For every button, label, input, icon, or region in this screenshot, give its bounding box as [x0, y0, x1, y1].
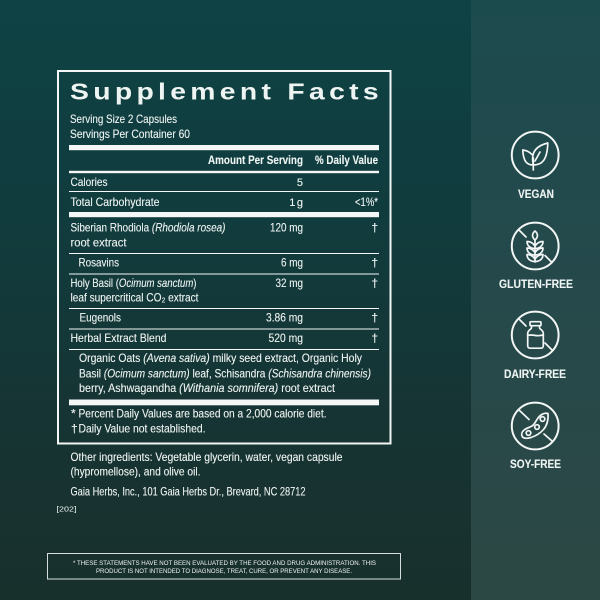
- badge: vegan: [512, 132, 559, 201]
- row: holy basil: Holy Basil (Ocimum sanctum): [70, 276, 196, 290]
- footnotes: †: [71, 422, 78, 436]
- table header: [208, 153, 378, 167]
- row: siberian rhodiola: Siberian Rhodiola (Rhodiola rosea): [70, 221, 226, 235]
- table header: % Daily Value: [315, 153, 378, 167]
- row: rosavins: 6 mg: [281, 256, 303, 270]
- row: eugenols: †: [371, 311, 378, 325]
- badge: vegan: VEGAN: [518, 187, 554, 201]
- blend ingredients: Organic Oats (Avena sativa) milky seed extract, Organic Holy: [79, 351, 362, 365]
- row: total carbohydrate: Total Carbohydrate: [70, 195, 160, 209]
- row: calories: [70, 175, 303, 189]
- badge: dairy-free: [504, 312, 566, 381]
- disclaimer box: [48, 554, 400, 579]
- row: rosavins: [78, 256, 378, 270]
- footnotes: Daily Value not established.: [78, 422, 206, 436]
- serving information: [70, 112, 190, 141]
- icon: crossed milk bottle: [512, 312, 559, 358]
- disclaimer box: PRODUCT IS NOT INTENDED TO DIAGNOSE, TREAT, CURE, OR PREVENT ANY DISEASE.: [96, 568, 352, 575]
- row: eugenols: 3.86 mg: [266, 311, 303, 325]
- panel: supplement facts: [58, 71, 390, 444]
- lot code: [202]: [56, 506, 77, 514]
- other ingredients: Other ingredients: Vegetable glycerin, water, vegan capsule: [70, 450, 343, 464]
- footnotes: [71, 407, 326, 436]
- blend ingredients: berry, Ashwagandha (Withania somnifera) root extract: [79, 381, 336, 395]
- table rules: [69, 145, 379, 405]
- icon: leaves: [512, 132, 559, 178]
- serving information: Servings Per Container 60: [70, 127, 190, 141]
- row: herbal extract blend: 520 mg: [268, 331, 303, 345]
- badge: gluten-free: [499, 223, 573, 291]
- row: holy basil: †: [371, 276, 378, 290]
- row: holy basil: leaf supercritical CO₂ extract: [70, 291, 199, 305]
- background: main panel: [0, 0, 471, 600]
- badge: dairy-free: DAIRY-FREE: [504, 367, 566, 381]
- icon: crossed wheat: [512, 223, 559, 269]
- row: herbal extract blend: [70, 331, 378, 345]
- row: total carbohydrate: [70, 195, 378, 209]
- row: total carbohydrate: <1%*: [355, 195, 378, 209]
- row: siberian rhodiola: 120 mg: [270, 221, 303, 235]
- footnotes: *: [71, 407, 76, 421]
- other ingredients: [70, 450, 343, 479]
- badge: gluten-free: GLUTEN-FREE: [499, 277, 573, 291]
- row: calories: 5: [297, 177, 303, 189]
- row: eugenols: Eugenols: [80, 311, 121, 325]
- row: herbal extract blend: †: [371, 331, 378, 345]
- row: holy basil: [70, 276, 378, 305]
- row: siberian rhodiola: †: [371, 221, 378, 235]
- disclaimer box: * THESE STATEMENTS HAVE NOT BEEN EVALUATED BY THE FOOD AND DRUG ADMINISTRATION. THIS: [73, 560, 377, 567]
- row: holy basil: 32 mg: [276, 276, 303, 290]
- row: siberian rhodiola: [70, 221, 378, 250]
- other ingredients: (hypromellose), and olive oil.: [70, 465, 200, 479]
- blend ingredients: Basil (Ocimum sanctum) leaf, Schisandra (Schisandra chinensis): [79, 366, 371, 380]
- footnotes: Percent Daily Values are based on a 2,000 calorie diet.: [78, 407, 326, 421]
- blend ingredients: [79, 351, 371, 395]
- manufacturer address: Gaia Herbs, Inc., 101 Gaia Herbs Dr., Brevard, NC 28712: [70, 485, 306, 499]
- row: total carbohydrate: 1 g: [289, 197, 303, 209]
- row: eugenols: [80, 311, 378, 325]
- row: herbal extract blend: Herbal Extract Blend: [70, 331, 166, 345]
- row: calories: Calories: [70, 175, 108, 189]
- row: rosavins: Rosavins: [78, 256, 119, 270]
- row: rosavins: †: [371, 256, 378, 270]
- background: side panel: [471, 0, 600, 600]
- badge: soy-free: SOY-FREE: [510, 457, 561, 471]
- icon: crossed soybean pod: [512, 403, 559, 449]
- serving information: Serving Size 2 Capsules: [70, 112, 177, 126]
- row: siberian rhodiola: root extract: [70, 236, 127, 250]
- table header: Amount Per Serving: [208, 153, 303, 167]
- title: Supplement Facts: [70, 78, 383, 104]
- badge: soy-free: [510, 403, 561, 471]
